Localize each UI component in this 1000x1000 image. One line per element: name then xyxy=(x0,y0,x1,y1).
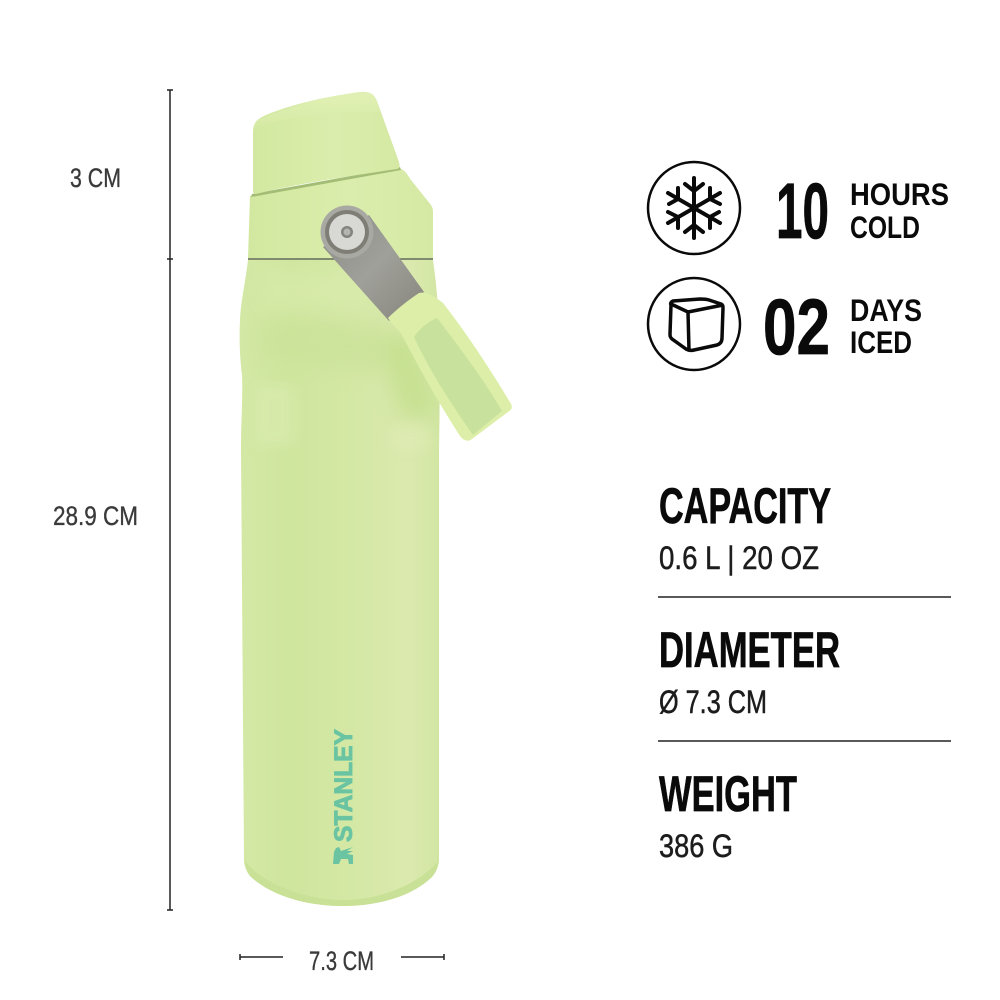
value: weight: 386 G xyxy=(659,828,733,864)
rubber handle tip xyxy=(388,293,512,441)
lid collar xyxy=(248,169,433,258)
pivot screw xyxy=(320,206,374,258)
icon: ice cube xyxy=(648,278,740,370)
body grip shading xyxy=(262,284,436,440)
lid cap xyxy=(253,92,400,194)
width dimension xyxy=(240,946,444,976)
label: cap height: 3 CM xyxy=(70,163,121,193)
icon: snowflake xyxy=(648,162,740,254)
handle inner recess xyxy=(414,318,502,435)
heading: weight: WEIGHT xyxy=(659,766,797,822)
cap top highlight xyxy=(254,92,381,128)
label: cold: COLD xyxy=(850,209,920,245)
heading: diameter: DIAMETER xyxy=(659,622,840,678)
label: iced: ICED xyxy=(850,324,912,360)
label: diameter width: 7.3 CM xyxy=(309,946,374,976)
value: capacity: 0.6 L | 20 OZ xyxy=(659,540,819,576)
spec: diameter xyxy=(659,622,840,720)
figure: 02: 02 xyxy=(763,282,830,371)
infographic canvas xyxy=(54,89,951,970)
spec: capacity xyxy=(659,478,831,576)
label: body height: 28.9 CM xyxy=(53,501,138,531)
metal strap xyxy=(323,215,424,321)
stat: hours cold xyxy=(648,162,949,255)
cap and collar gap xyxy=(251,167,401,197)
spec: weight xyxy=(659,766,797,864)
height dimension scale xyxy=(53,90,173,910)
bottle xyxy=(240,92,512,906)
stat: days iced xyxy=(648,278,922,371)
icon: stanley lion xyxy=(333,847,353,864)
label: days: DAYS xyxy=(850,292,922,328)
logo: stanley wordmark: STANLEY xyxy=(330,729,358,842)
value: diameter: Ø 7.3 CM xyxy=(659,684,767,720)
collar seam xyxy=(248,258,433,260)
label: hours: HOURS xyxy=(850,176,949,212)
bottle base shading xyxy=(244,860,439,906)
heading: capacity: CAPACITY xyxy=(659,478,831,534)
figure: 10: 10 xyxy=(776,166,829,255)
bottle body xyxy=(240,260,440,906)
